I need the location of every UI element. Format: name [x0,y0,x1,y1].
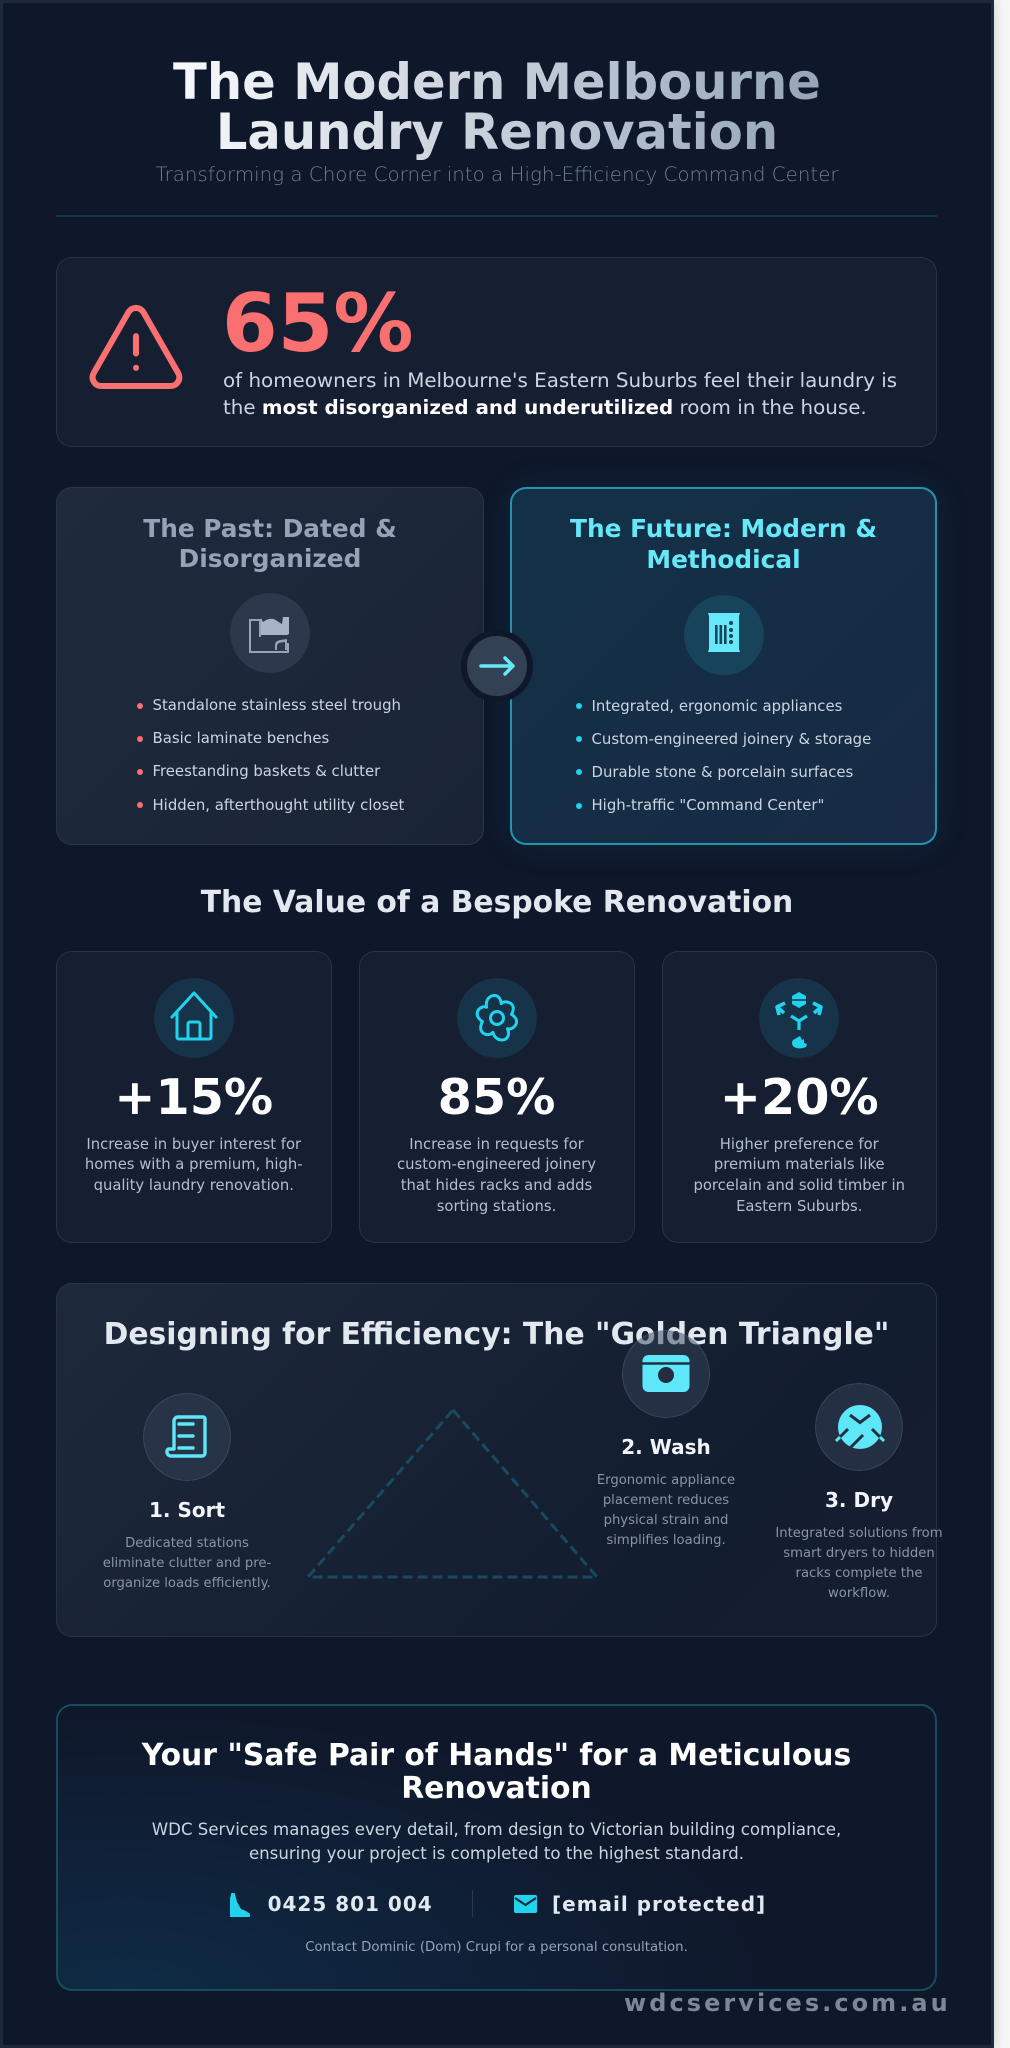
card: buyer interest [56,951,332,1243]
title: The Modern Melbourne [173,52,821,110]
stat description [223,369,897,419]
card: material preference [662,951,937,1243]
list: future features [576,696,871,814]
stat description: custom-engineered joinery [397,1156,596,1173]
text: WDC services: WDC Services manages every detail, from design to Victorian building compliance, [152,1820,841,1839]
stat description: the most disorganized and underutilized room in the house. [223,396,867,419]
label: 3. Dry: 3. Dry [825,1488,893,1512]
list: past problems: Freestanding baskets & clutter [152,762,380,780]
description: wash: Ergonomic appliance [597,1473,735,1488]
icon: mail [514,1895,537,1913]
stat description: Increase in buyer interest for [86,1136,301,1152]
panel: the past [56,487,484,845]
description: dry: Integrated solutions from [775,1526,943,1541]
icon: phone [230,1893,250,1917]
description: wash [597,1473,735,1548]
description: wash: physical strain and [604,1513,728,1528]
stat description: Increase in requests for [409,1136,584,1152]
heading: golden triangle: Designing for Efficiency: The "Golden Triangle" [104,1317,889,1352]
icon: integrated joinery [684,595,764,675]
description: dry: smart dryers to hidden [783,1546,935,1561]
heading: safe pair of hands: Your "Safe Pair of Hands" for a Meticulous [142,1738,851,1772]
text: phone number: 0425 801 004 [268,1892,433,1916]
icon: scroll list [143,1393,231,1481]
stat: +15%: +15% [114,1068,273,1126]
arrow: past to future [461,632,533,700]
stat description: premium materials like [714,1156,885,1173]
list: future features: Integrated, ergonomic appliances [592,696,842,714]
description: sort: organize loads efficiently. [103,1576,271,1591]
heading: the future: The Future: Modern & [570,514,877,543]
panel: golden triangle [56,1283,937,1637]
description: wash: simplifies loading. [606,1533,726,1548]
list: past problems: Standalone stainless steel trough [152,696,401,714]
heading: value section: The Value of a Bespoke Renovation [201,885,793,920]
node: sort [103,1393,271,1591]
description: dry: racks complete the [796,1566,922,1581]
subtitle: Transforming a Chore Corner into a High-Efficiency Command Center [155,163,839,186]
stat description: that hides racks and adds [401,1177,592,1194]
list: past problems: Basic laminate benches [152,729,329,747]
list: future features: High-traffic "Command Center" [592,796,824,814]
website watermark: wdcservices.com.au [624,1989,951,2017]
list: past problems: Hidden, afterthought utility closet [152,796,404,814]
icon: materials cube arrows [759,978,839,1058]
icon: dryer [815,1383,903,1471]
heading: the past: Disorganized [179,544,361,573]
icon: warning triangle [89,304,182,389]
node: dry [775,1383,943,1601]
text: email: [email protected] [552,1892,766,1916]
stat description [85,1136,303,1194]
stat description [397,1136,596,1215]
description: sort [103,1536,271,1591]
title [173,52,821,160]
panel: call to action [56,1704,937,1991]
heading: the future [570,514,877,574]
heading: safe pair of hands: Renovation [401,1770,592,1806]
list: future features: Durable stone & porcelain surfaces [592,763,853,781]
stat description: porcelain and solid timber in [693,1177,905,1194]
heading: the past: The Past: Dated & [143,514,397,542]
description: sort: Dedicated stations [125,1536,249,1551]
list: past problems [137,696,404,814]
description: sort: eliminate clutter and pre- [103,1556,271,1571]
triangle diagram [307,1409,598,1578]
stat: +20%: +20% [720,1068,879,1126]
heading: the past [143,514,397,573]
label: 2. Wash: 2. Wash [621,1435,711,1459]
panel: the future [510,487,937,845]
icon: house [154,978,234,1058]
icon: old trough [230,593,310,673]
heading: safe pair of hands [142,1738,851,1806]
description: wash: placement reduces [603,1493,729,1508]
stat description: quality laundry renovation. [94,1177,294,1194]
text: WDC services [152,1820,841,1863]
stat description: Higher preference for [720,1136,879,1152]
description: dry [775,1526,943,1601]
icon: washing machine [622,1330,710,1418]
big stat 65%: 65% [222,277,413,370]
stat: 85%: 85% [438,1068,555,1126]
stat description: Eastern Suburbs. [736,1198,862,1215]
stat description [693,1136,905,1215]
stat description: homes with a premium, high- [85,1156,303,1173]
stat description: of homeowners in Melbourne's Eastern Suburbs feel their laundry is [223,369,897,392]
label: 1. Sort: 1. Sort [149,1498,225,1522]
card: joinery requests [358,951,634,1243]
text: contact note: Contact Dominic (Dom) Crupi for a personal consultation. [305,1940,688,1955]
icon: gear [457,978,537,1058]
text: WDC services: ensuring your project is completed to the highest standard. [249,1844,744,1863]
panel: 65% alert [56,257,937,447]
description: dry: workflow. [828,1586,890,1601]
node: wash [597,1330,735,1548]
list: future features: Custom-engineered joinery & storage [592,730,871,748]
stat description: sorting stations. [437,1198,556,1215]
title: Laundry Renovation [216,102,778,160]
heading: the future: Methodical [646,544,801,574]
